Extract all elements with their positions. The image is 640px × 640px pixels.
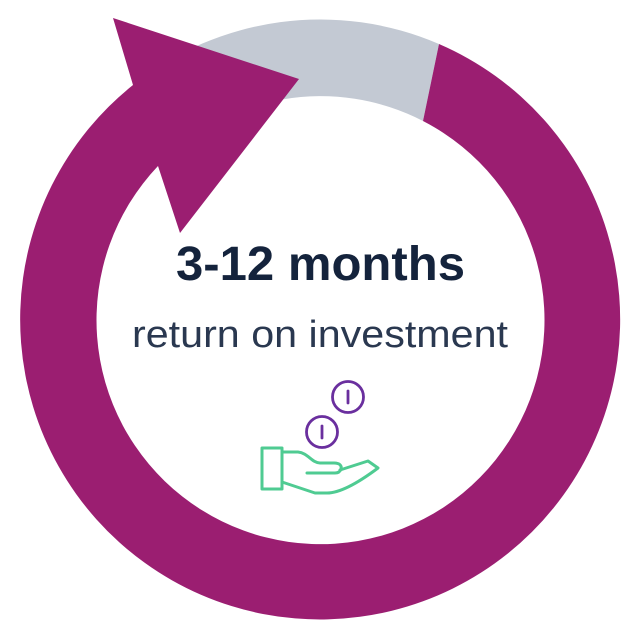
icon: hand receiving coins: [262, 382, 378, 493]
heading: 3-12 months: 3-12 months: [176, 238, 465, 291]
gray remaining ring segment: [133, 19, 439, 166]
icon: upper coin: [332, 382, 364, 412]
icon: hand: [262, 448, 378, 493]
subheading: return on investment: return on investment: [132, 314, 508, 356]
icon: lower coin: [306, 416, 338, 448]
